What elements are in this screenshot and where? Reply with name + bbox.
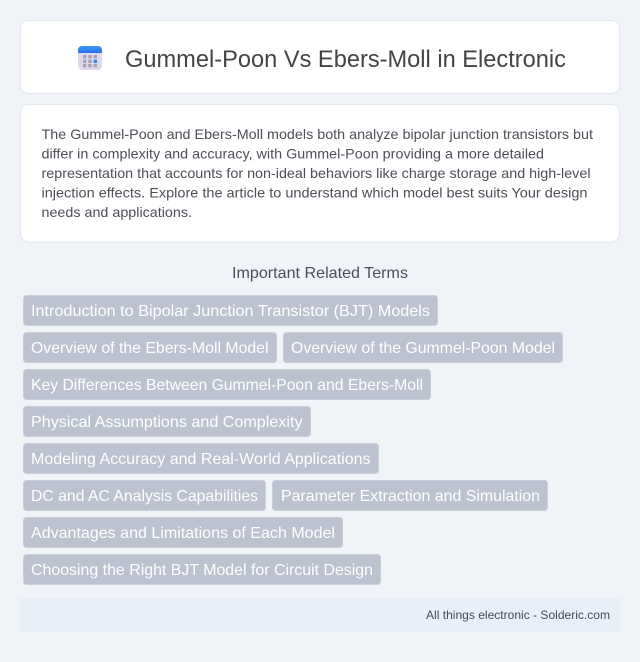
- summary text: The Gummel-Poon and Ebers-Moll models both analyze bipolar junction transistors but: [42, 126, 593, 142]
- summary text: needs and applications.: [42, 204, 192, 220]
- tag: [24, 444, 378, 474]
- tag: Modeling Accuracy and Real-World Applications: [31, 451, 371, 468]
- panel: header: [20, 20, 620, 94]
- tag: [24, 370, 430, 400]
- panel: summary: [20, 104, 620, 242]
- tag: [272, 480, 548, 510]
- footer text: All things electronic - Solderic.com: [426, 608, 610, 622]
- tag: Physical Assumptions and Complexity: [31, 414, 302, 431]
- summary text: [42, 126, 593, 220]
- tag: [24, 518, 342, 548]
- tag: [24, 296, 438, 326]
- tag: [24, 554, 380, 584]
- tag: Parameter Extraction and Simulation: [281, 488, 540, 505]
- tag: Choosing the Right BJT Model for Circuit Design: [31, 562, 373, 579]
- tag: Advantages and Limitations of Each Model: [31, 525, 335, 542]
- tag list: [24, 296, 562, 584]
- summary text: representation that accounts for non-ideal behaviors like charge storage and high-level: [42, 165, 590, 181]
- icon: calendar: [78, 46, 102, 70]
- tag: Overview of the Gummel-Poon Model: [291, 340, 555, 357]
- tag: Overview of the Ebers-Moll Model: [31, 340, 268, 357]
- heading: related terms: Important Related Terms: [232, 265, 408, 282]
- title: Gummel-Poon Vs Ebers-Moll in Electronic: [125, 46, 566, 73]
- tag: Introduction to Bipolar Junction Transistor (BJT) Models: [31, 303, 430, 320]
- summary text: injection effects. Explore the article to understand which model best suits Your design: [42, 184, 588, 200]
- tag: DC and AC Analysis Capabilities: [31, 488, 258, 505]
- summary text: differ in complexity and accuracy, with Gummel-Poon providing a more detailed: [42, 146, 544, 162]
- tag: [24, 406, 310, 436]
- tag: [24, 332, 276, 362]
- tag: [24, 480, 266, 510]
- footer: [20, 598, 620, 632]
- tag: Key Differences Between Gummel-Poon and Ebers-Moll: [31, 377, 423, 394]
- tag: [284, 332, 562, 362]
